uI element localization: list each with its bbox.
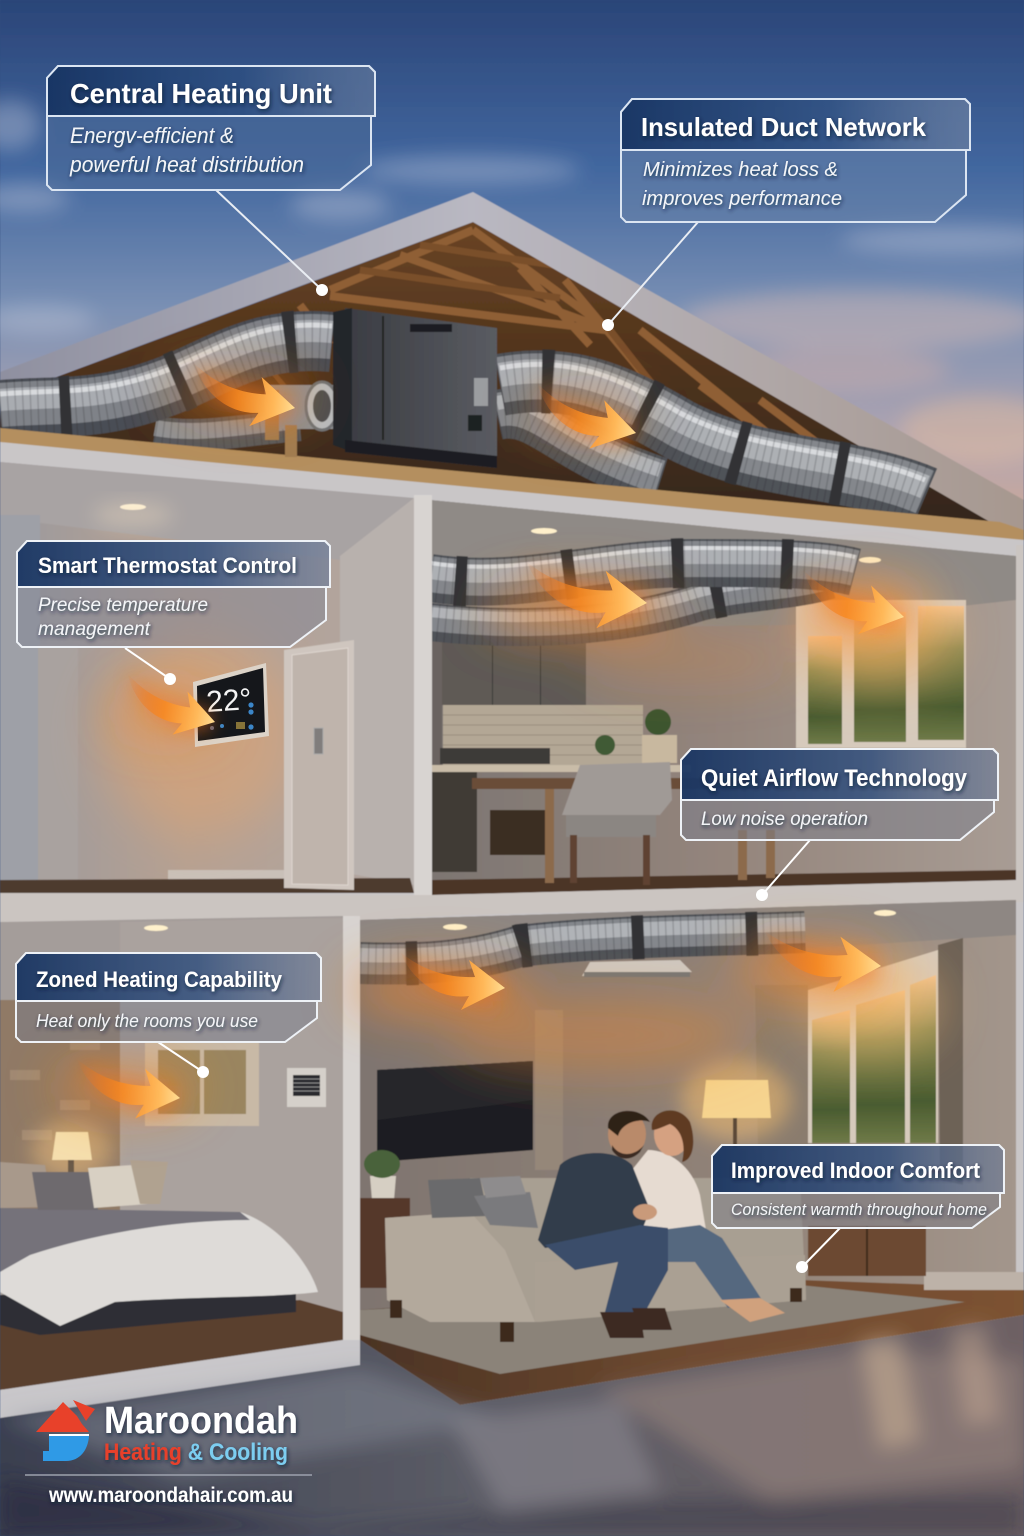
- heat arrow: thermostat: [118, 672, 221, 741]
- heat arrow: attic left: [188, 361, 298, 430]
- rug: [360, 1285, 965, 1374]
- title: Quiet Airflow Technology: [701, 765, 968, 792]
- ceiling diffuser: [582, 960, 692, 977]
- wall vent: [287, 1068, 326, 1107]
- duct stub: [265, 382, 338, 457]
- upper left room: [0, 462, 414, 893]
- description: [69, 123, 304, 177]
- lower left room: [0, 916, 343, 1390]
- kitchen window: [796, 585, 966, 748]
- heat arrow: living room right: [764, 924, 882, 994]
- callout: Improved Indoor Comfort: [712, 1145, 1004, 1228]
- bedroom lamp: [32, 1120, 112, 1180]
- thermostat: [193, 663, 269, 747]
- ducts upper right room: [430, 548, 855, 627]
- upper right room: [430, 500, 1016, 895]
- callout: Quiet Airflow Technology: [681, 749, 998, 840]
- living window and curtains: [755, 938, 963, 1185]
- description: Energv-efficient &: [70, 123, 234, 148]
- ducts attic: [0, 325, 925, 497]
- lower right room: [360, 900, 1024, 1405]
- connector: central heating: [216, 190, 328, 296]
- heat arrow: attic right: [529, 381, 641, 455]
- callout: Smart Thermostat Control: [17, 541, 330, 647]
- description: Minimizes heat loss &: [643, 159, 838, 181]
- house walls base: [0, 442, 1024, 1420]
- heat arrow: kitchen window: [797, 568, 908, 639]
- callout: Insulated Duct Network: [621, 99, 970, 222]
- heat arrow: upper room: [526, 559, 647, 628]
- connector: indoor comfort: [796, 1228, 840, 1273]
- sideboard: [808, 1226, 926, 1276]
- duct lower room: [360, 924, 805, 964]
- interior dividers lower: [0, 916, 360, 1418]
- heat arrow: living room left: [400, 950, 505, 1010]
- description: [38, 595, 208, 640]
- bedroom window: [145, 1042, 259, 1126]
- description: Low noise operation: [701, 809, 868, 830]
- polished foreground floor: [0, 1315, 1024, 1536]
- attic floor: [0, 428, 1024, 545]
- description: [642, 159, 842, 210]
- central heating unit: [333, 308, 497, 468]
- warm airflow glows: [55, 373, 915, 1112]
- roof fascia: [0, 192, 1024, 530]
- heat arrow: bedroom: [74, 1056, 181, 1120]
- icon: house: [36, 1400, 95, 1461]
- connector: duct network: [602, 222, 698, 331]
- callout: Central Heating Unit: [47, 66, 375, 190]
- kitchen: [430, 630, 780, 885]
- floor lamp: [681, 1060, 791, 1148]
- description: powerful heat distribution: [69, 152, 304, 177]
- website: www.maroondahair.com.au: [48, 1484, 293, 1507]
- sky background: [0, 0, 1024, 560]
- callout: Zoned Heating Capability: [16, 953, 321, 1042]
- television: [377, 1061, 533, 1162]
- title: Central Heating Unit: [70, 78, 332, 109]
- title: Insulated Duct Network: [641, 112, 927, 142]
- man: [538, 1111, 672, 1338]
- floor divider slabs: [0, 495, 1024, 922]
- sofa: [385, 1176, 806, 1342]
- description: Consistent warmth throughout home: [731, 1200, 987, 1219]
- description: Heat only the rooms you use: [36, 1011, 258, 1031]
- connector: thermostat: [125, 648, 176, 685]
- title: Smart Thermostat Control: [38, 553, 297, 578]
- description: Precise temperature: [38, 595, 208, 616]
- brand subtitle: Heating & Cooling: [104, 1439, 288, 1466]
- logo: Maroondah Heating & Cooling: [25, 1400, 312, 1507]
- connector: quiet airflow: [756, 840, 810, 901]
- door: [284, 640, 354, 890]
- woman: [632, 1110, 785, 1322]
- title: Improved Indoor Comfort: [731, 1158, 981, 1183]
- couple on sofa: [538, 1110, 785, 1338]
- bed: [0, 1160, 318, 1335]
- description: improves performance: [642, 188, 842, 210]
- title: Zoned Heating Capability: [36, 967, 283, 992]
- brand name: Maroondah: [104, 1400, 298, 1442]
- side plant: [360, 1150, 410, 1288]
- attic interior: [0, 222, 1000, 526]
- thermostat: 22°: [205, 683, 253, 719]
- connector: zoned heating: [158, 1042, 209, 1078]
- description: management: [38, 619, 151, 640]
